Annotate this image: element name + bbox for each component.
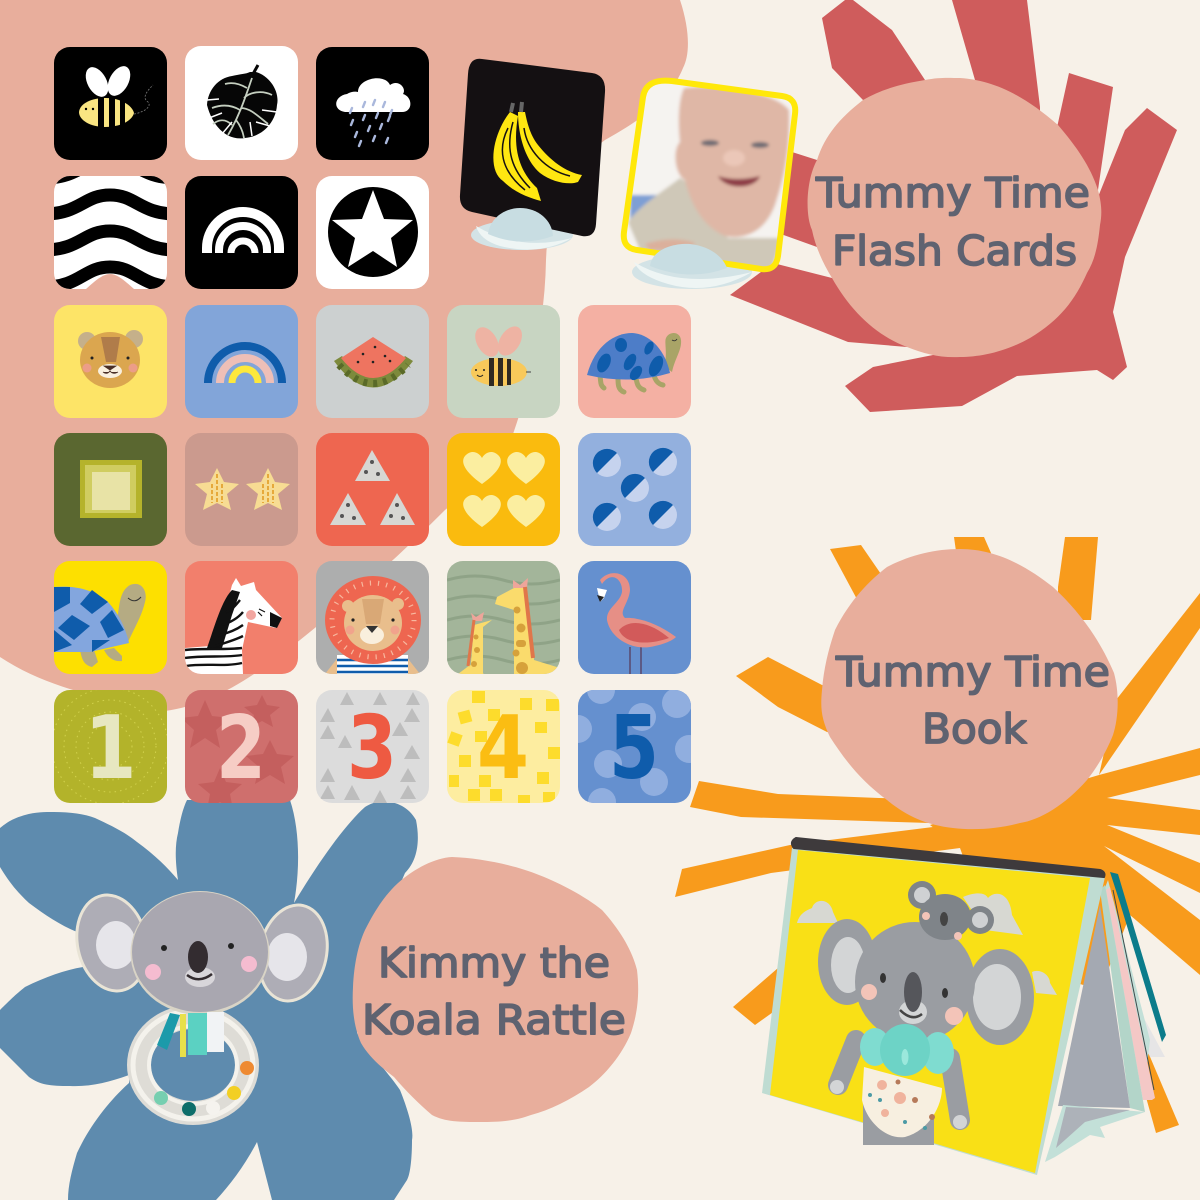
tile: bee black and white bbox=[54, 47, 167, 160]
tile: bear bbox=[54, 305, 167, 418]
label text: Tummy Time bbox=[835, 648, 1110, 696]
tile: number 1 bbox=[52, 688, 168, 804]
back pages bbox=[1045, 872, 1166, 1162]
tile: two stars bbox=[185, 433, 298, 546]
icon: mirror stand base bbox=[632, 255, 752, 289]
pocket with terrazzo pattern bbox=[862, 1067, 942, 1137]
tile: turtle bbox=[578, 305, 691, 418]
book koala bbox=[818, 919, 1034, 1145]
tile: black and white waves bbox=[54, 176, 167, 289]
koala rattle toy bbox=[66, 887, 338, 1119]
pink background blob bbox=[0, 0, 688, 711]
tile: half circles bbox=[578, 433, 691, 546]
clouds bbox=[797, 893, 1057, 995]
label circle: Tummy Time Flash Cards bbox=[808, 78, 1101, 357]
tile: number 5 bbox=[578, 690, 691, 803]
front cover bbox=[762, 848, 1105, 1175]
card bbox=[460, 59, 605, 236]
tile: blue rainbow bbox=[185, 305, 298, 418]
tile: number 3: 3 bbox=[347, 697, 397, 799]
tummy time book bbox=[762, 838, 1166, 1175]
yellow frame bbox=[624, 81, 795, 269]
label text: Book bbox=[922, 705, 1027, 753]
teether toy bbox=[860, 1024, 954, 1076]
tile: watermelon bbox=[316, 305, 429, 418]
tile: number 5: 5 bbox=[609, 697, 659, 799]
tile: triangles bbox=[316, 433, 429, 546]
label text: Koala Rattle bbox=[362, 996, 626, 1044]
tile: number 4: 4 bbox=[477, 697, 529, 799]
tile: squares bbox=[54, 433, 167, 546]
koala head bbox=[130, 891, 270, 1015]
rattle ring bbox=[133, 1011, 254, 1119]
label text: Flash Cards bbox=[832, 227, 1077, 275]
tile: white rainbow bbox=[185, 176, 298, 289]
tile: lion bbox=[316, 561, 429, 674]
tile: zebra bbox=[185, 561, 298, 674]
tile: number 4 bbox=[447, 690, 560, 805]
tile: flamingo bbox=[578, 561, 691, 674]
tile: number 2: 2 bbox=[216, 697, 266, 799]
label circle: Kimmy the Koala Rattle bbox=[353, 857, 638, 1122]
koala ears bbox=[66, 887, 338, 1009]
mirror card with baby photo bbox=[620, 76, 800, 289]
label text: Kimmy the bbox=[378, 939, 610, 987]
tile: yellow turtle bbox=[54, 561, 167, 674]
tile: hearts bbox=[447, 433, 560, 546]
baby koala bbox=[908, 881, 994, 940]
blue flower shape bbox=[0, 800, 418, 1200]
tile: number 2 bbox=[181, 690, 298, 810]
tile: giraffes bbox=[447, 561, 560, 674]
tile: star in circle bbox=[316, 176, 429, 289]
tile: pastel bee bbox=[447, 305, 560, 418]
icon: mirror stand dome bbox=[634, 244, 752, 288]
orange sunburst shape bbox=[675, 537, 1200, 1133]
tile: number 3 bbox=[316, 690, 429, 803]
icon: card stand base bbox=[471, 220, 573, 250]
baby photo bbox=[628, 84, 790, 266]
icon: bananas bbox=[493, 102, 582, 201]
spine bbox=[792, 838, 1104, 877]
icon: card stand dome bbox=[476, 208, 572, 250]
flash card stand: banana card bbox=[460, 59, 605, 250]
tile: rain cloud bbox=[316, 47, 429, 160]
label text: Tummy Time bbox=[815, 169, 1090, 217]
ribbons bbox=[157, 1012, 224, 1057]
tile: number 1: 1 bbox=[84, 697, 136, 799]
tile: leaf bbox=[185, 46, 298, 160]
label circle: Tummy Time Book bbox=[821, 549, 1118, 829]
red hand shape bbox=[730, 0, 1177, 412]
